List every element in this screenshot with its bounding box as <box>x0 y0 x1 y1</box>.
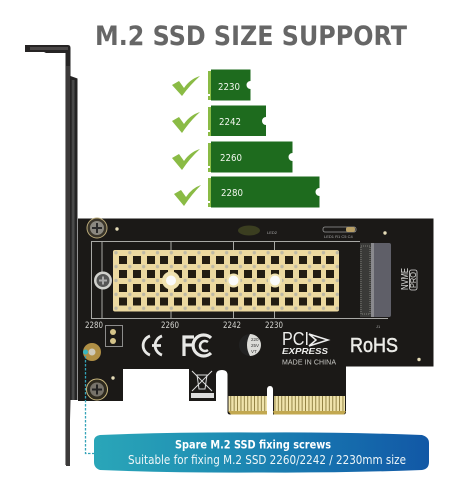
gold finger base <box>228 411 346 414</box>
size list <box>172 70 320 208</box>
ssd 2280 <box>208 176 320 208</box>
check 2280 <box>174 185 201 206</box>
silkscreen outline <box>92 242 388 318</box>
gold heatsink area <box>113 250 339 312</box>
gold spare standoff <box>83 343 101 361</box>
ssd 2242: 2242 <box>219 117 241 128</box>
title: M.2 SSD SIZE SUPPORT <box>95 21 408 52</box>
ssd 2260: 2260 <box>220 153 242 164</box>
capacitor: VT <box>251 349 257 354</box>
callout banner: Spare M.2 SSD fixing screws <box>175 438 331 452</box>
size labels: 2260 <box>161 321 179 331</box>
solder dots <box>111 227 421 380</box>
size labels: 2230 <box>265 321 283 331</box>
ssd 2260 <box>208 142 292 172</box>
led area: LED1 R1 C5 C4 <box>324 234 353 239</box>
mounting holes <box>162 272 180 290</box>
spare screw <box>86 379 108 400</box>
leader dot <box>83 350 88 354</box>
callout banner: Suitable for fixing M.2 SSD 2260/2242 / 2230mm size <box>128 453 406 467</box>
pci express logo <box>282 329 328 356</box>
rohs: RoHS <box>350 334 398 357</box>
callout banner <box>94 432 429 473</box>
ce mark <box>143 336 162 355</box>
ssd 2242 <box>208 106 266 136</box>
led area: LED2 <box>267 230 278 235</box>
pcb board <box>78 218 434 414</box>
led area <box>238 226 381 329</box>
ssd 2280: 2280 <box>221 188 243 199</box>
fcc mark <box>184 335 211 356</box>
ssd 2230: 2230 <box>218 82 240 93</box>
gold fingers right <box>274 396 345 411</box>
m.2 slot connector <box>360 243 391 317</box>
recycling mark <box>191 371 214 398</box>
made in china: MADE IN CHINA <box>282 360 336 366</box>
size labels <box>85 321 283 331</box>
size labels: 2280 <box>85 321 103 331</box>
check 2230 <box>172 76 200 96</box>
screw top <box>87 218 107 238</box>
check 2242 <box>172 112 200 133</box>
gold fingers left <box>228 396 267 411</box>
capacitor: 220 <box>251 337 259 342</box>
metal bracket <box>25 45 78 466</box>
nvme pro <box>400 268 418 290</box>
pci express logo: EXPRESS <box>282 346 328 356</box>
size labels: 2242 <box>223 321 241 331</box>
capacitor <box>239 334 261 356</box>
check 2260 <box>172 149 200 170</box>
led area: J1 <box>376 324 381 329</box>
j2 header <box>106 326 122 346</box>
screw standoff <box>94 272 112 290</box>
nvme pro: PRO <box>409 272 418 288</box>
capacitor: 25V <box>251 343 259 348</box>
dashed leader line <box>86 352 94 454</box>
ssd 2230 <box>208 70 250 100</box>
nvme pro: NVME <box>400 268 411 290</box>
pci express logo: PCI <box>282 329 309 349</box>
